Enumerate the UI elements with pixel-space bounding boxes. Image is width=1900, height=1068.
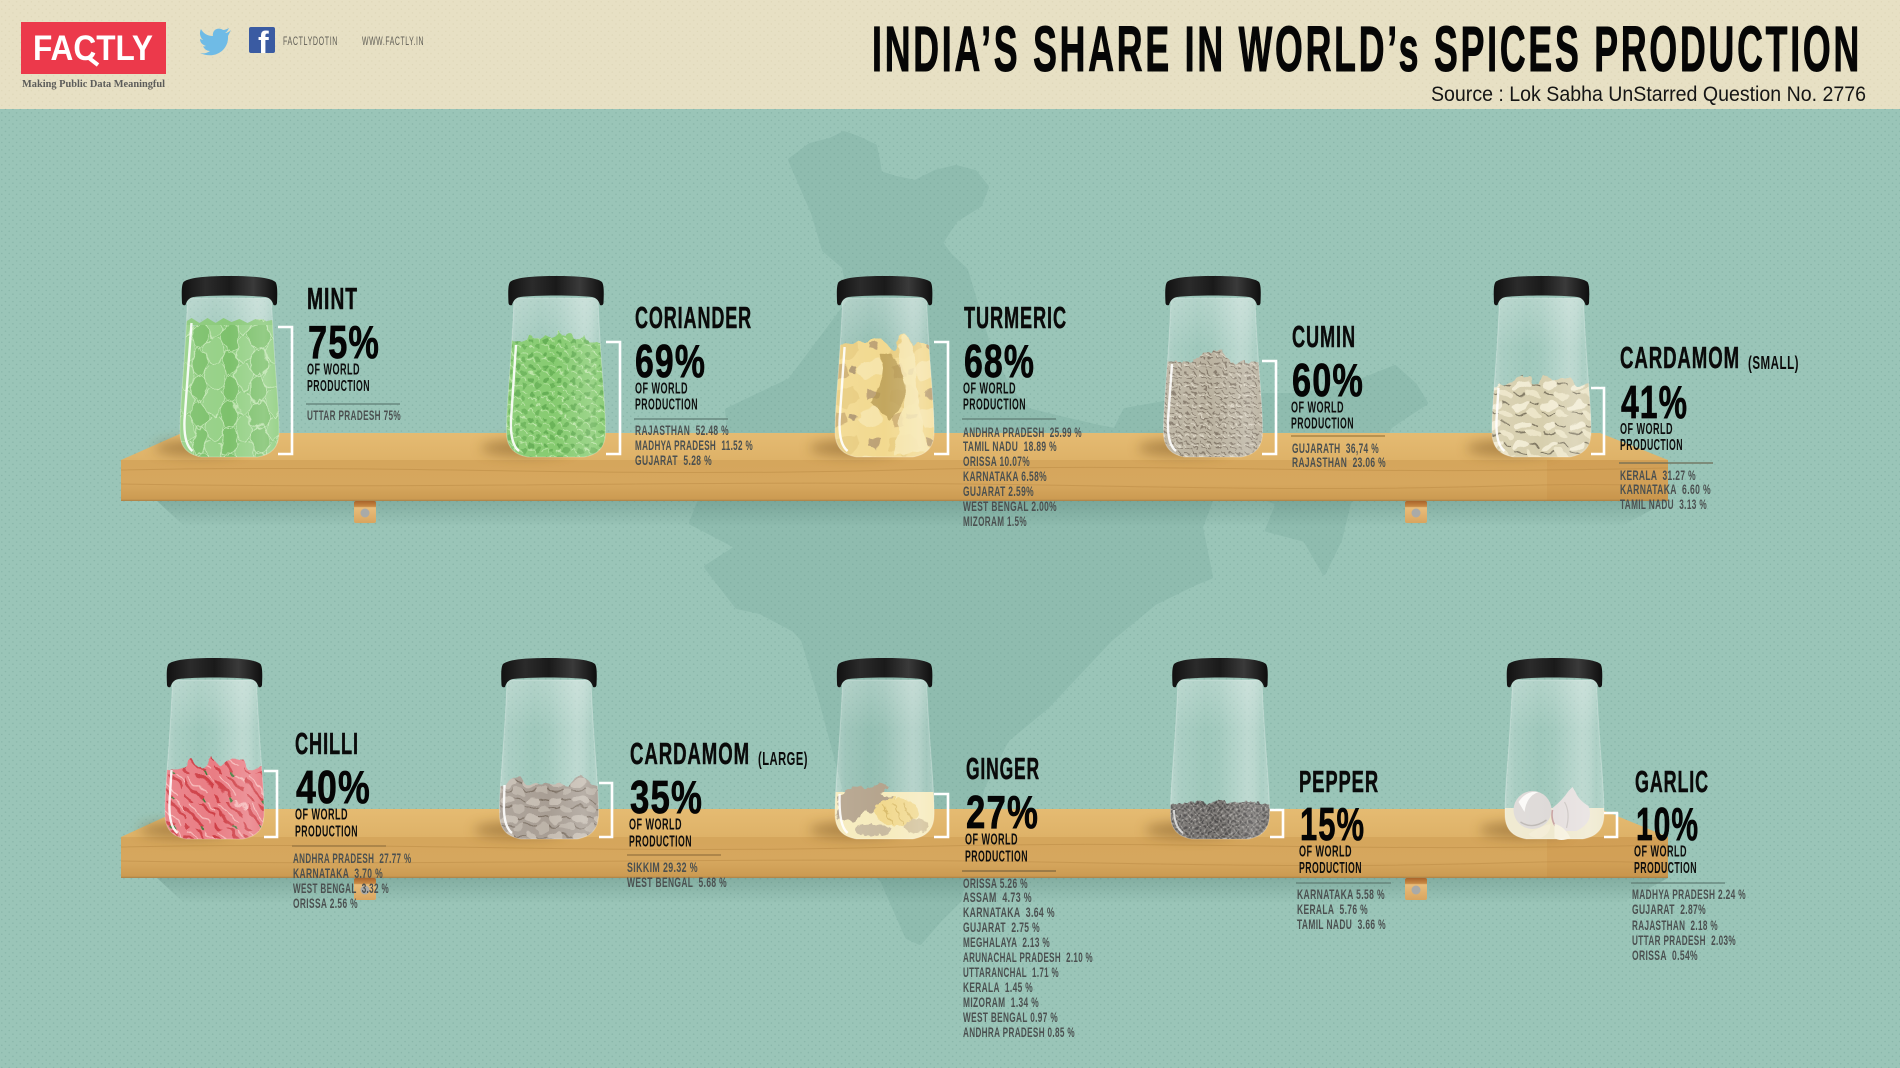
share: 27% bbox=[966, 786, 1039, 838]
state list: SIKKIM 29.32 % bbox=[627, 860, 698, 875]
state list: GUJARAT 2.75 % bbox=[963, 920, 1040, 935]
caption bbox=[635, 380, 698, 414]
caption: OF WORLD bbox=[635, 380, 688, 398]
fill level bracket bbox=[264, 771, 277, 837]
name: (LARGE) bbox=[758, 749, 808, 769]
bracket right bbox=[1405, 501, 1427, 523]
name: CHILLI bbox=[295, 727, 359, 761]
fill level bracket bbox=[934, 794, 948, 837]
caption: PRODUCTION bbox=[629, 834, 692, 850]
state list bbox=[1296, 883, 1391, 932]
fill level bracket bbox=[278, 327, 292, 454]
share: 75% bbox=[308, 316, 380, 368]
jar: turmeric bbox=[810, 276, 937, 460]
name: (SMALL) bbox=[1748, 353, 1799, 373]
state list bbox=[1631, 883, 1746, 963]
source line: Source : Lok Sabha UnStarred Question No. 2776 bbox=[1431, 83, 1866, 106]
state list: ANDHRA PRADESH 27.77 % bbox=[293, 851, 412, 866]
caption: PRODUCTION bbox=[1634, 860, 1697, 877]
jar: ginger bbox=[810, 658, 937, 842]
caption: OF WORLD bbox=[629, 816, 682, 834]
panel: ginger bbox=[810, 658, 1093, 1040]
caption: OF WORLD bbox=[963, 380, 1016, 398]
caption bbox=[1620, 421, 1683, 454]
state list: KERALA 1.45 % bbox=[963, 980, 1033, 995]
state list: WEST BENGAL 2.00% bbox=[963, 499, 1057, 514]
share: 10% bbox=[1636, 798, 1699, 850]
state list: ORISSA 0.54% bbox=[1632, 948, 1698, 963]
name: PEPPER bbox=[1299, 765, 1379, 799]
jar: garlic bbox=[1480, 658, 1606, 842]
jar: cardamom small bbox=[1466, 276, 1594, 460]
panel: mint bbox=[154, 276, 401, 467]
state list: ASSAM 4.73 % bbox=[963, 890, 1032, 905]
icon: facebook: f bbox=[258, 25, 269, 61]
caption bbox=[963, 380, 1026, 414]
caption: PRODUCTION bbox=[965, 848, 1028, 866]
icon: twitter bird bbox=[200, 28, 231, 55]
state list bbox=[634, 419, 753, 468]
logo: Factly: FACTLY bbox=[33, 29, 153, 68]
social handle: FACTLYDOTIN bbox=[283, 34, 338, 48]
state list: MEGHALAYA 2.13 % bbox=[963, 935, 1050, 950]
state list: ANDHRA PRADESH 25.99 % bbox=[963, 425, 1082, 440]
bracket right bbox=[1405, 878, 1427, 900]
fill level bracket bbox=[1262, 361, 1276, 454]
state list: GUJARAT 5.28 % bbox=[635, 453, 712, 468]
state list: ORISSA 5.26 % bbox=[963, 876, 1028, 891]
state list: WEST BENGAL 5.68 % bbox=[627, 875, 727, 890]
state list: ORISSA 2.56 % bbox=[293, 896, 358, 911]
map of India watermark bbox=[691, 133, 1426, 943]
share: 15% bbox=[1300, 798, 1365, 850]
caption bbox=[1634, 844, 1697, 877]
state list: KERALA 5.76 % bbox=[1297, 902, 1368, 917]
state list bbox=[962, 419, 1082, 529]
fill level bracket bbox=[1604, 813, 1617, 837]
state list: MADHYA PRADESH 11.52 % bbox=[635, 438, 753, 453]
state list: TAMIL NADU 3.13 % bbox=[1620, 497, 1707, 512]
panel: garlic bbox=[1480, 658, 1746, 963]
share: 40% bbox=[296, 761, 371, 813]
state list bbox=[1291, 436, 1386, 470]
caption: OF WORLD bbox=[1291, 400, 1344, 416]
caption: OF WORLD bbox=[965, 832, 1018, 848]
share: 35% bbox=[630, 771, 703, 823]
caption bbox=[965, 832, 1028, 866]
caption: PRODUCTION bbox=[963, 396, 1026, 414]
state list: KARNATAKA 3.64 % bbox=[963, 905, 1055, 920]
state list: TAMIL NADU 3.66 % bbox=[1297, 917, 1386, 932]
state list: TAMIL NADU 18.89 % bbox=[963, 439, 1057, 454]
bracket left bbox=[354, 878, 376, 900]
state list: KARNATAKA 3.70 % bbox=[293, 866, 383, 881]
state list: KARNATAKA 6.60 % bbox=[1620, 482, 1711, 497]
panel: chilli bbox=[140, 658, 412, 911]
caption: PRODUCTION bbox=[1299, 860, 1362, 877]
name: MINT bbox=[307, 282, 358, 316]
shelf: bottom row bbox=[121, 809, 1668, 904]
jar: mint bbox=[154, 276, 290, 467]
caption: OF WORLD bbox=[1299, 844, 1352, 860]
state list: MIZORAM 1.34 % bbox=[963, 995, 1039, 1010]
panel: pepper bbox=[1145, 658, 1391, 932]
caption: PRODUCTION bbox=[1291, 416, 1354, 432]
panel: cardamom large bbox=[474, 658, 808, 890]
caption: PRODUCTION bbox=[635, 396, 698, 414]
state list: RAJASTHAN 23.06 % bbox=[1292, 455, 1386, 470]
caption: PRODUCTION bbox=[307, 378, 370, 395]
panel: cumin bbox=[1138, 276, 1386, 470]
share: 41% bbox=[1621, 376, 1688, 428]
caption: OF WORLD bbox=[307, 362, 360, 378]
state list: KARNATAKA 5.58 % bbox=[1297, 887, 1385, 902]
shelf: top row bbox=[121, 433, 1668, 527]
caption bbox=[629, 816, 692, 850]
logo tagline: Making Public Data Meaningful bbox=[22, 78, 165, 90]
header band bbox=[0, 0, 1900, 109]
state list: WEST BENGAL 3.32 % bbox=[293, 881, 389, 896]
state list: UTTARANCHAL 1.71 % bbox=[963, 965, 1059, 980]
jar: pepper bbox=[1145, 658, 1272, 842]
state list: KARNATAKA 6.58% bbox=[963, 469, 1047, 484]
icon: facebook bbox=[249, 27, 275, 53]
caption bbox=[295, 806, 358, 840]
state list: UTTAR PRADESH 75% bbox=[307, 408, 401, 423]
caption: OF WORLD bbox=[1634, 844, 1687, 860]
bracket left bbox=[354, 501, 376, 523]
state list bbox=[292, 846, 412, 911]
jar: coriander bbox=[481, 276, 608, 460]
logo: Factly bbox=[21, 22, 166, 74]
state list bbox=[627, 855, 727, 890]
state list: GUJARATH 36,74 % bbox=[1292, 441, 1379, 456]
caption: OF WORLD bbox=[1620, 421, 1673, 438]
state list: GUJARAT 2.87% bbox=[1632, 902, 1706, 917]
state list: WEST BENGAL 0.97 % bbox=[963, 1010, 1058, 1025]
jar: cumin bbox=[1138, 276, 1265, 460]
caption: OF WORLD bbox=[295, 806, 348, 824]
name: GARLIC bbox=[1635, 765, 1709, 799]
state list bbox=[962, 871, 1093, 1040]
jar: cardamom large bbox=[474, 658, 601, 842]
state list bbox=[1619, 463, 1713, 512]
share: 68% bbox=[964, 335, 1035, 387]
state list: RAJASTHAN 2.18 % bbox=[1632, 918, 1718, 933]
state list: RAJASTHAN 52.48 % bbox=[635, 423, 729, 438]
state list bbox=[306, 404, 401, 423]
jar: chilli bbox=[140, 658, 266, 842]
caption bbox=[1299, 844, 1362, 877]
name: GINGER bbox=[966, 752, 1040, 786]
panel: coriander bbox=[481, 276, 753, 468]
fill level bracket bbox=[606, 342, 620, 454]
panel: turmeric bbox=[810, 276, 1082, 529]
state list: ORISSA 10.07% bbox=[963, 454, 1030, 469]
caption: PRODUCTION bbox=[1620, 437, 1683, 454]
share: 69% bbox=[635, 335, 706, 387]
share: 60% bbox=[1292, 354, 1364, 406]
state list: UTTAR PRADESH 2.03% bbox=[1632, 933, 1736, 948]
state list: MIZORAM 1.5% bbox=[963, 514, 1027, 529]
fill level bracket bbox=[1591, 388, 1604, 454]
state list: ANDHRA PRADESH 0.85 % bbox=[963, 1025, 1075, 1040]
name: CORIANDER bbox=[635, 301, 752, 335]
state list: MADHYA PRADESH 2.24 % bbox=[1632, 887, 1746, 902]
caption bbox=[307, 362, 370, 395]
name: TURMERIC bbox=[964, 301, 1067, 335]
state list: ARUNACHAL PRADESH 2.10 % bbox=[963, 950, 1093, 965]
name: CARDAMOM bbox=[1620, 341, 1740, 375]
fill level bracket bbox=[599, 783, 612, 837]
website: WWW.FACTLY.IN bbox=[362, 34, 424, 48]
fill level bracket bbox=[1270, 810, 1283, 837]
caption bbox=[1291, 400, 1354, 432]
caption: PRODUCTION bbox=[295, 824, 358, 840]
state list: KERALA 31.27 % bbox=[1620, 468, 1696, 483]
state list: GUJARAT 2.59% bbox=[963, 484, 1034, 499]
fill level bracket bbox=[934, 342, 948, 454]
name: CUMIN bbox=[1292, 320, 1356, 354]
name: CARDAMOM bbox=[630, 737, 750, 771]
panel: cardamom small bbox=[1466, 276, 1799, 512]
